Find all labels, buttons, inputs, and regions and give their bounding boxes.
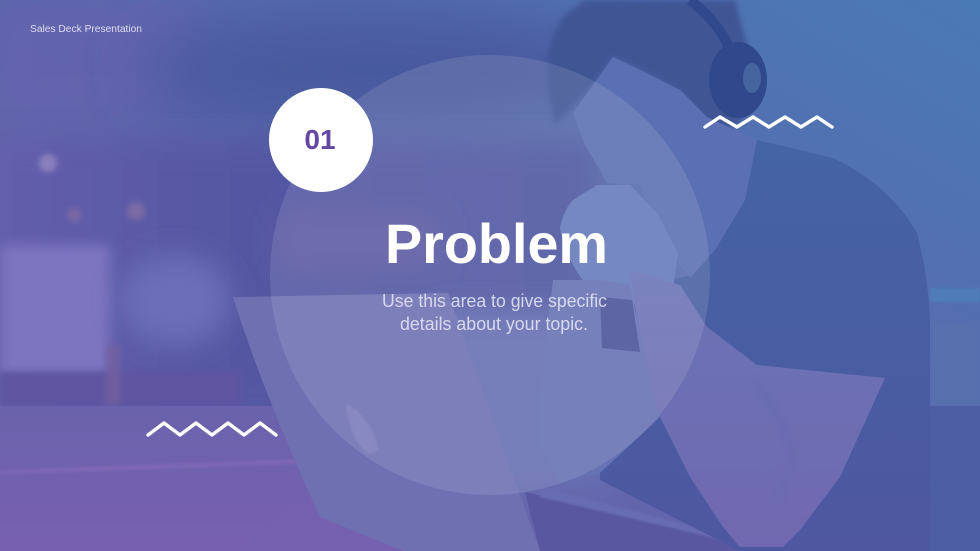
number badge: 01	[304, 124, 336, 155]
description: details about your topic.	[400, 314, 588, 334]
hair	[547, 0, 747, 135]
right forearm and upper arm	[630, 270, 885, 547]
headphones	[690, 0, 767, 118]
header label: Sales Deck Presentation	[30, 23, 142, 35]
description: Use this area to give specific	[382, 291, 607, 311]
number badge	[269, 88, 373, 192]
title: Problem	[385, 212, 608, 275]
zigzag top right	[705, 117, 832, 127]
shirt	[600, 140, 930, 551]
zigzag bottom left	[148, 423, 276, 435]
neck and face	[573, 57, 757, 278]
left forearm	[540, 280, 660, 483]
arm crease	[757, 380, 795, 505]
laptop	[233, 293, 745, 551]
man	[540, 0, 930, 551]
description	[382, 291, 607, 334]
dark underarm	[600, 297, 640, 352]
translucent large circle	[270, 55, 710, 495]
hands	[560, 185, 678, 305]
